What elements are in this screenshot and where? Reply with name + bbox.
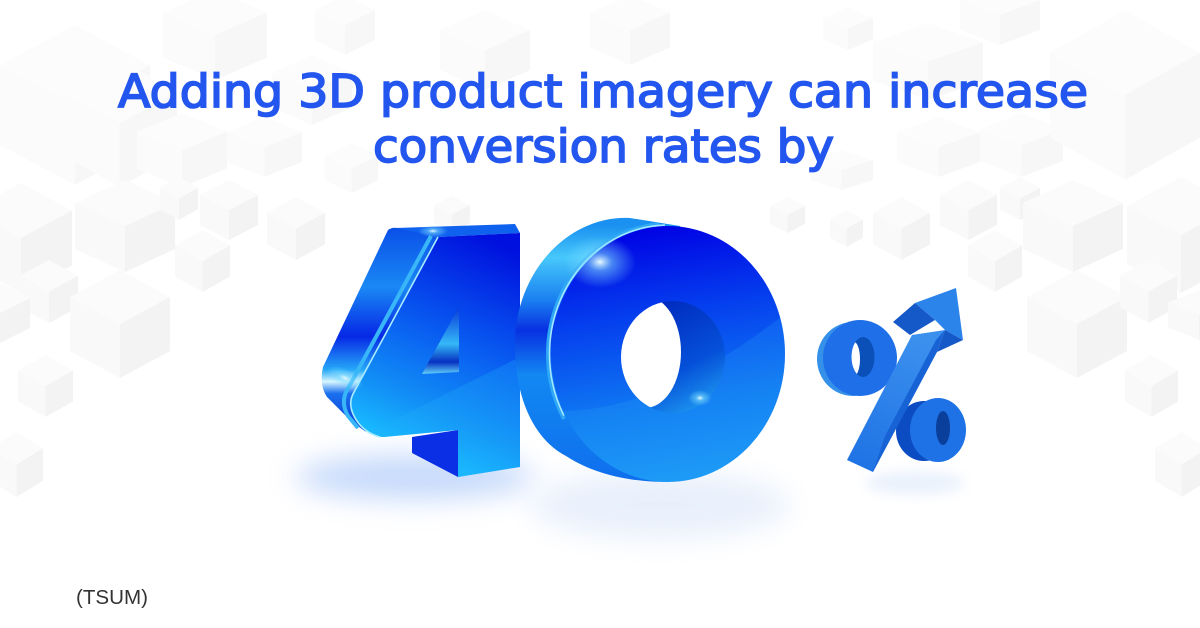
- arrow: [847, 288, 963, 472]
- title: conversion rates by: [373, 120, 834, 173]
- percent sign with upward arrow: [817, 288, 966, 472]
- digit 4: [322, 224, 520, 480]
- title: [118, 65, 1088, 173]
- lower percent circle: [896, 398, 966, 462]
- title: Adding 3D product imagery can increase: [118, 65, 1088, 118]
- source note: (TSUM): [76, 587, 148, 609]
- big number 40: [322, 218, 790, 490]
- digit 0: [515, 218, 790, 490]
- upper percent circle: [817, 320, 897, 396]
- floor reflection: [295, 455, 965, 539]
